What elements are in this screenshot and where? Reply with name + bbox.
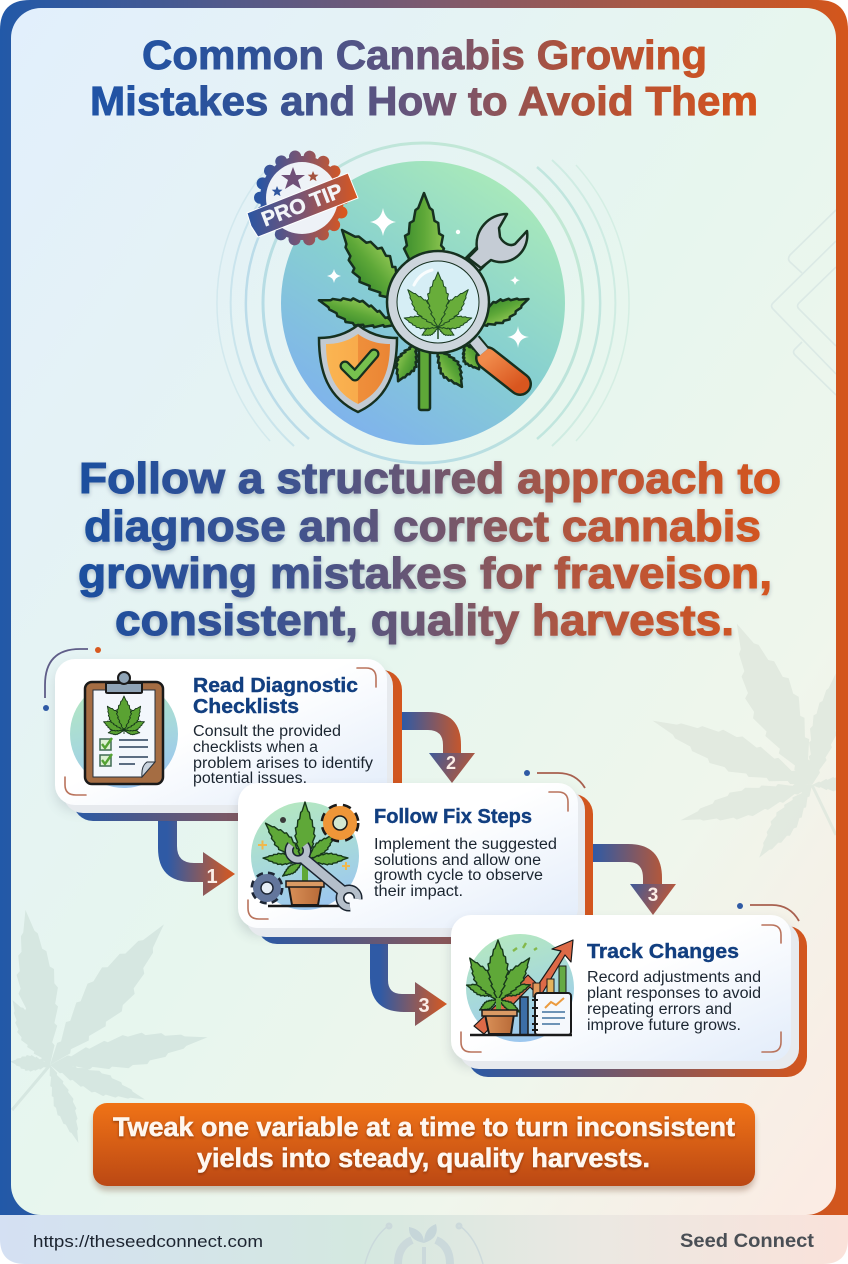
icon: plant with growth chart xyxy=(462,934,574,1042)
callout banner: yields into steady, quality harvests. xyxy=(197,1143,650,1173)
step card 3 xyxy=(451,903,807,1077)
card 1 text: checklists when a xyxy=(193,739,318,756)
title: Common Cannabis Growing xyxy=(142,32,707,78)
pro tip badge xyxy=(247,156,358,240)
card 3 text: plant responses to avoid xyxy=(587,985,761,1002)
title: Mistakes and How to Avoid Them xyxy=(90,78,758,124)
wrench xyxy=(462,214,527,275)
concentric rings xyxy=(217,143,629,463)
arrow 3: card 2 to card 3 xyxy=(593,844,676,915)
card 2 text: their impact. xyxy=(374,883,463,900)
arrow 2: card 1 to card 2 xyxy=(402,712,475,783)
arrow 3: lower connector: 3 xyxy=(418,995,430,1017)
background leaf: right xyxy=(654,624,836,857)
card corner brackets xyxy=(461,925,781,1052)
decorative line and dot xyxy=(524,770,585,788)
card 2 text xyxy=(374,805,557,900)
card 3 text: Track Changes xyxy=(587,940,739,963)
card 3 text: Record adjustments and xyxy=(587,969,761,986)
card 1 text: problem arises to identify xyxy=(193,755,373,772)
sparkles xyxy=(327,208,529,348)
card 2 text: Follow Fix Steps xyxy=(374,805,532,828)
step card 2 xyxy=(238,770,593,944)
card 3 text: repeating errors and xyxy=(587,1001,732,1018)
arrow 3: lower connector xyxy=(370,940,447,1026)
footer emblem xyxy=(365,1224,483,1264)
card 1 text: Consult the provided xyxy=(193,723,341,740)
main statement: consistent, quality harvests. xyxy=(115,596,734,645)
large plant leaves xyxy=(315,193,533,410)
arrow 3: card 2 to card 3: 3 xyxy=(648,885,658,906)
card 3 text xyxy=(587,940,761,1034)
hero circle xyxy=(281,161,565,445)
main statement: Follow a structured approach to xyxy=(79,454,781,503)
main statement: diagnose and correct cannabis xyxy=(84,502,761,551)
icon: plant with wrench and gears xyxy=(251,802,359,910)
card 2 text: growth cycle to observe xyxy=(374,867,543,884)
shield with check xyxy=(319,325,397,412)
magnifying glass xyxy=(387,251,520,384)
footer bar xyxy=(0,1215,848,1264)
card 1 text: Checklists xyxy=(193,695,299,718)
card corner brackets xyxy=(65,668,376,795)
main statement: growing mistakes for fraveison, xyxy=(78,549,772,598)
icon: checklist clipboard xyxy=(70,672,178,788)
background leaf: bottom left xyxy=(2,907,210,1147)
decorative chevrons xyxy=(772,210,836,395)
card 1 text: Read Diagnostic xyxy=(193,674,358,697)
pro tip badge: PRO TIP xyxy=(258,179,346,231)
arrow 2: card 1 to card 2: 2 xyxy=(446,753,456,773)
callout banner: Tweak one variable at a time to turn inconsistent xyxy=(113,1112,735,1142)
card 1 text: potential issues. xyxy=(193,770,307,787)
title xyxy=(90,32,758,124)
card 1 text xyxy=(193,674,373,787)
decorative line and dots xyxy=(43,647,101,711)
card 3 text: improve future grows. xyxy=(587,1017,741,1034)
leaf in lens xyxy=(402,272,474,339)
decorative line and dot xyxy=(737,903,799,921)
card 2 text: solutions and allow one xyxy=(374,852,541,869)
main statement xyxy=(78,454,781,645)
card corner brackets xyxy=(248,792,568,919)
arrow 1: card 1 to card 2: 1 xyxy=(206,866,218,888)
website: https://theseedconnect.com xyxy=(33,1232,263,1251)
step card 1 xyxy=(43,647,402,821)
callout banner xyxy=(93,1103,755,1191)
arrow 1: card 1 to card 2 xyxy=(158,818,235,896)
hero illustration xyxy=(217,143,629,463)
card 2 text: Implement the suggested xyxy=(374,836,557,853)
brand: Seed Connect xyxy=(680,1231,815,1252)
